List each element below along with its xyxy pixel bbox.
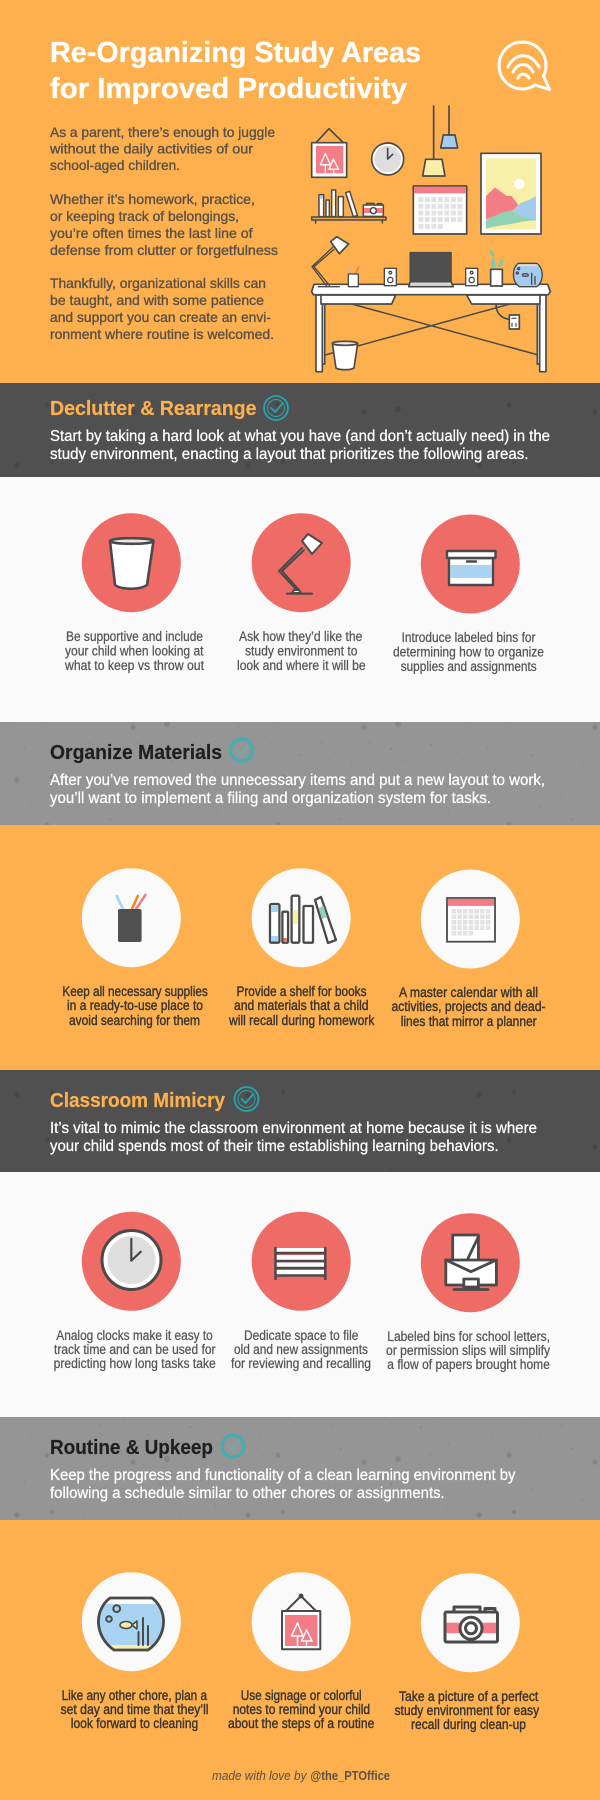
tip: analog clock <box>54 1212 216 1371</box>
heading: declutter: Declutter & Rearrange <box>50 397 256 420</box>
caption <box>393 630 544 674</box>
icon: clock <box>102 1230 161 1290</box>
tip: labeled bins <box>393 514 544 674</box>
caption: avoid searching for them <box>69 1013 200 1028</box>
caption: Be supportive and include <box>66 629 203 644</box>
caption: Provide a shelf for books <box>236 984 367 999</box>
caption: Ask how they’d like the <box>239 629 362 644</box>
icon: waste basket <box>110 538 154 589</box>
text block: intro paragraphs: defense from clutter or forgetfulness <box>50 242 278 258</box>
caption: predicting how long tasks take <box>54 1356 216 1371</box>
caption: in a ready-to-use place to <box>67 998 203 1013</box>
landscape poster <box>481 153 541 234</box>
panel: declutter and rearrange heading band <box>0 383 600 477</box>
caption: and materials that a child <box>234 998 368 1013</box>
waste basket <box>332 341 358 370</box>
caption: Dedicate space to file <box>244 1328 358 1343</box>
icon: filing shelves <box>276 1248 326 1279</box>
tip: fish bowl chore <box>60 1572 208 1731</box>
icon: teal check badge <box>234 1087 258 1111</box>
text block: classroom description: your child spends most of their time establishing learning behaviors. <box>50 1138 499 1155</box>
icon: calendar <box>447 898 495 942</box>
caption: for reviewing and recalling <box>231 1356 371 1371</box>
tip: include your child <box>64 513 204 673</box>
text block: organize description: After you’ve removed the unnecessary items and put a new layout to work, <box>50 772 545 789</box>
caption: notes to remind your child <box>233 1702 370 1717</box>
panel: routine tips <box>60 1572 539 1732</box>
icon: desk lamp <box>279 534 322 594</box>
icon: row of books <box>270 896 336 943</box>
text block: intro paragraphs: you’re often times the last line of <box>50 225 253 241</box>
title: Re-Organizing Study Areas <box>50 37 421 69</box>
caption: Labeled bins for school letters, <box>387 1329 550 1344</box>
tip: picture of clean space <box>394 1573 539 1732</box>
text block: intro paragraphs: and support you can create an envi- <box>50 309 271 325</box>
caption: Take a picture of a perfect <box>399 1689 539 1704</box>
caption <box>394 1689 539 1732</box>
text block: routine description: Keep the progress and functionality of a clean learning environment by <box>50 1467 516 1484</box>
panel: organize tips <box>62 868 546 1029</box>
text block: intro paragraphs: Whether it’s homework, practice, <box>50 191 255 207</box>
caption <box>237 629 366 673</box>
text block: declutter description: study environment, enacting a layout that prioritizes the following areas. <box>50 446 528 463</box>
panel: classroom tips <box>0 1172 600 1417</box>
wall art frame <box>312 129 347 177</box>
text block: intro paragraphs: ronment where routine is welcomed. <box>50 326 274 342</box>
icon: fish bowl <box>98 1598 164 1650</box>
wall clock <box>372 143 404 175</box>
text block: intro paragraphs: Thankfully, organizational skills can <box>50 275 266 291</box>
text block: intro paragraphs: or keeping track of belongings, <box>50 208 239 224</box>
icon: teal check badge <box>264 396 288 420</box>
icon: teal check badge <box>230 739 252 761</box>
tip: book shelf <box>228 868 375 1028</box>
bookshelf with books and camera <box>312 190 386 223</box>
caption: look forward to cleaning <box>71 1716 198 1731</box>
pen cup <box>348 267 359 287</box>
footer credit: made with love by <box>212 1769 307 1783</box>
speakers <box>384 268 478 286</box>
text block: declutter description <box>50 428 550 463</box>
caption: Introduce labeled bins for <box>402 630 536 645</box>
heading: organize materials: Organize Materials <box>50 741 222 764</box>
caption <box>228 984 375 1028</box>
caption: old and new assignments <box>234 1342 368 1357</box>
caption <box>54 1328 216 1371</box>
icon: envelope tray <box>446 1235 496 1290</box>
heading: routine and upkeep: Routine & Upkeep <box>50 1436 213 1459</box>
wall calendar <box>413 186 467 234</box>
caption: track time and can be used for <box>54 1342 216 1357</box>
footer credit <box>212 1769 390 1783</box>
laptop <box>409 253 453 287</box>
caption: Analog clocks make it easy to <box>56 1328 213 1343</box>
text block: classroom description: It’s vital to mimic the classroom environment at home because it is where <box>50 1120 537 1137</box>
icon: teal check badge <box>222 1435 244 1457</box>
caption <box>228 1688 374 1731</box>
text block: intro paragraphs: without the daily activities of our <box>49 140 253 156</box>
panel: organize materials heading band <box>0 722 600 825</box>
caption <box>392 985 546 1029</box>
caption: your child when looking at <box>65 643 204 658</box>
text block: intro paragraphs: As a parent, there’s enough to juggle <box>50 124 275 140</box>
caption: activities, projects and dead- <box>392 999 546 1014</box>
text block: organize description: you’ll want to implement a filing and organization system for tasks. <box>50 790 491 807</box>
caption: A master calendar with all <box>399 985 538 1000</box>
icon: camera <box>445 1607 498 1642</box>
caption: what to keep vs throw out <box>64 658 204 673</box>
tip: signage <box>228 1572 374 1731</box>
footer credit: @the_PTOffice <box>310 1769 390 1783</box>
text block: routine description: following a schedule similar to other chores or assignments. <box>50 1485 445 1502</box>
illustration: study room with desk <box>312 106 550 372</box>
desk lamp <box>312 237 349 287</box>
heading: classroom mimicry: Classroom Mimicry <box>50 1089 226 1112</box>
title: for Improved Productivity <box>50 73 407 105</box>
caption: supplies and assignments <box>401 659 537 674</box>
caption: look and where it will be <box>237 658 366 673</box>
caption: a flow of papers brought home <box>387 1357 550 1372</box>
text block: intro paragraphs: be taught, and with some patience <box>50 292 264 308</box>
panel: header intro <box>49 37 550 372</box>
caption: Use signage or colorful <box>241 1688 362 1703</box>
icon: hanging sign <box>282 1594 320 1649</box>
tip: master calendar <box>392 870 546 1029</box>
text block: organize description <box>50 772 545 807</box>
caption: recall during clean-up <box>411 1717 526 1732</box>
icon: pencil cup <box>117 895 145 942</box>
tip: school letters <box>386 1213 550 1372</box>
panel: classroom mimicry heading band <box>0 1070 600 1172</box>
caption: lines that mirror a planner <box>401 1014 537 1029</box>
text block: routine description <box>50 1467 516 1502</box>
caption: Like any other chore, plan a <box>62 1688 207 1703</box>
panel: declutter tips <box>0 477 600 722</box>
caption <box>60 1688 208 1731</box>
caption: study environment for easy <box>394 1703 539 1718</box>
plant pot <box>489 249 504 286</box>
caption <box>64 629 204 673</box>
caption <box>386 1329 550 1372</box>
caption: study environment to <box>245 643 358 658</box>
desk <box>312 284 550 372</box>
caption: set day and time that they’ll <box>60 1702 208 1717</box>
panel: routine and upkeep heading band <box>0 1417 600 1520</box>
title <box>50 37 421 105</box>
icon: speech bubble logo <box>499 42 550 90</box>
text block: intro paragraphs: school-aged children. <box>50 157 180 173</box>
icon: storage box <box>447 551 496 585</box>
pendant lamps <box>423 106 458 176</box>
tip: supplies cup <box>62 868 208 1028</box>
caption <box>62 984 208 1028</box>
small fish bowl <box>513 263 542 287</box>
caption: will recall during homework <box>228 1013 375 1028</box>
text block: classroom description <box>50 1120 537 1155</box>
caption: determining how to organize <box>393 644 544 660</box>
caption: about the steps of a routine <box>228 1716 374 1731</box>
tip: filing tray <box>231 1212 371 1371</box>
text block: intro paragraphs <box>49 124 278 342</box>
tip: ask how they'd like it <box>237 513 366 673</box>
caption <box>231 1328 371 1371</box>
caption: Keep all necessary supplies <box>62 984 208 999</box>
caption: or permission slips will simplify <box>386 1343 550 1358</box>
text block: declutter description: Start by taking a hard look at what you have (and don’t actually need) in the <box>50 428 550 445</box>
